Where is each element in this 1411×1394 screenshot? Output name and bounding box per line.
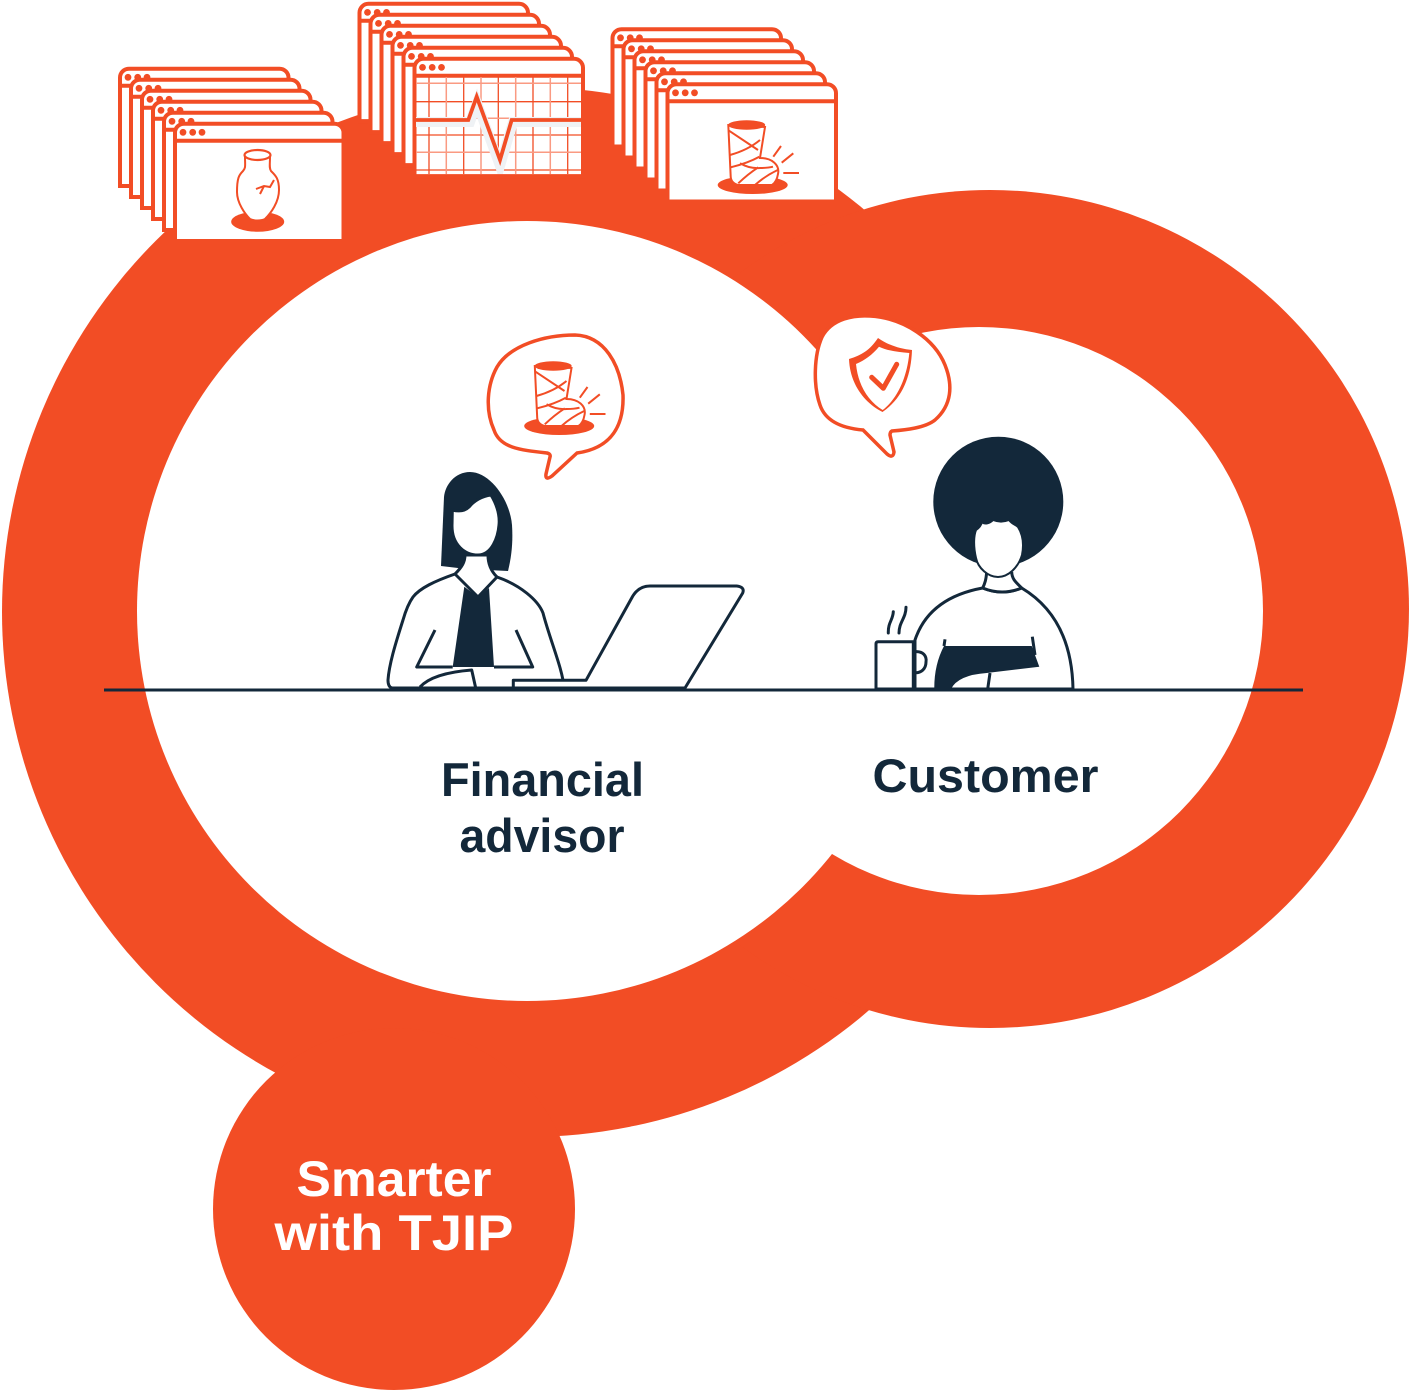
window stack: heart monitor: [360, 4, 583, 176]
icon: broken vase: [231, 150, 284, 232]
face: [974, 520, 1023, 577]
label: financial advisor: advisor: [460, 809, 624, 862]
tie: [453, 587, 494, 667]
window stack: broken foot claims: [612, 29, 836, 202]
sleeve: [934, 646, 1039, 689]
window stack: vase claims: [120, 69, 344, 241]
table line: [104, 688, 1303, 692]
label: financial advisor: Financial: [441, 753, 644, 806]
hair: [441, 472, 512, 571]
icon: leg cast: [718, 120, 799, 194]
figure: financial advisor: [388, 472, 743, 688]
laptop: [513, 586, 743, 688]
icon: leg cast in bubble: [524, 361, 606, 435]
label: smarter with TJIP: [273, 1151, 514, 1261]
face: [452, 495, 499, 555]
neck: [983, 572, 1022, 592]
figure: customer: [876, 437, 1073, 689]
jacket and arms: [388, 574, 564, 688]
speech bubble: advisor thinks of cast: [488, 335, 623, 478]
mug: [876, 642, 913, 689]
speech bubble: customer thinks of protection: [815, 316, 950, 456]
steam: [888, 607, 906, 633]
neck: [455, 555, 497, 597]
label: customer: Customer: [872, 749, 1098, 802]
label: financial advisor: [441, 753, 644, 862]
sweater: [915, 588, 1073, 689]
label: smarter with TJIP: with TJIP: [273, 1205, 514, 1261]
afro hair: [933, 437, 1063, 567]
chart: ECG grid: [416, 77, 581, 174]
icon: shield with check: [849, 338, 912, 412]
label: smarter with TJIP: Smarter: [296, 1151, 492, 1207]
